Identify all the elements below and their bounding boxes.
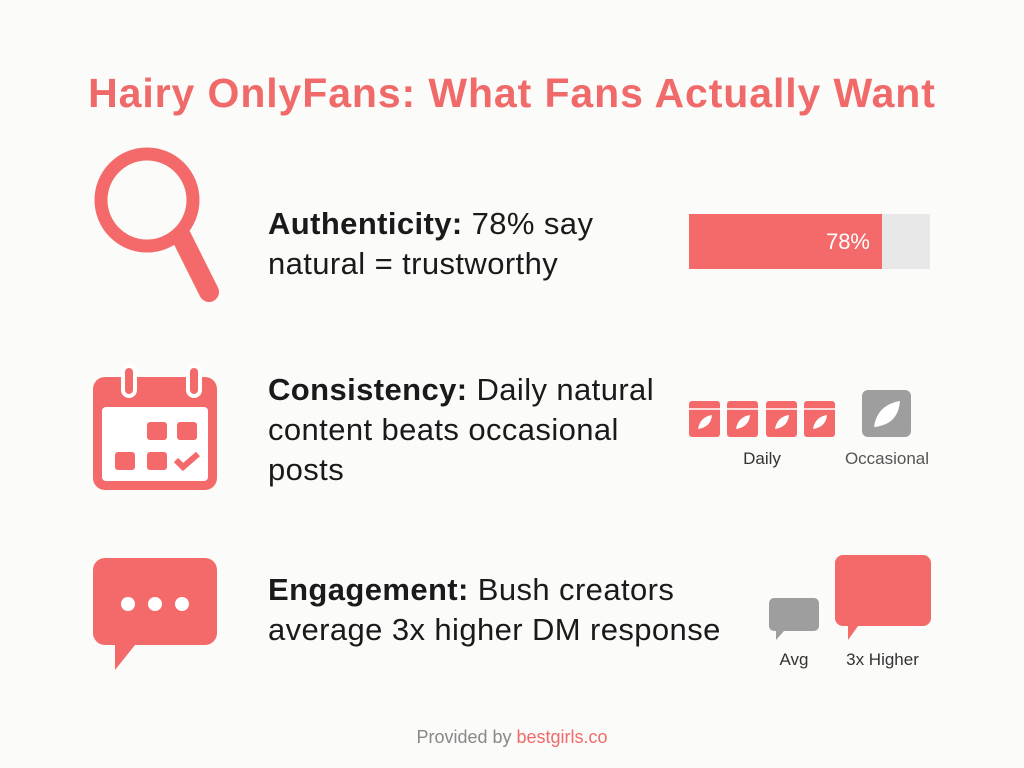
text: consistency	[268, 372, 654, 487]
text: engagement: Engagement: Bush creators	[268, 572, 674, 607]
text: authenticity: Authenticity: 78% say	[268, 206, 593, 241]
text: consistency: posts	[268, 452, 344, 487]
chart: DM response bubbles	[769, 555, 931, 640]
text: authenticity	[268, 206, 593, 281]
label: 3x higher: 3x Higher	[846, 650, 919, 669]
text: engagement: average 3x higher DM response	[268, 612, 721, 647]
label: daily: Daily	[743, 449, 781, 468]
title: Hairy OnlyFans: What Fans Actually Want	[88, 70, 936, 116]
text: consistency: content beats occasional	[268, 412, 619, 447]
bar chart: 78%: 78%	[826, 229, 870, 254]
text: engagement	[268, 572, 721, 647]
icon: magnifier	[94, 148, 219, 302]
icon: calendar	[93, 368, 217, 490]
text: consistency: Consistency: Daily natural	[268, 372, 654, 407]
icon: chat bubble	[93, 558, 217, 670]
label: avg: Avg	[780, 650, 808, 669]
label: occasional: Occasional	[845, 449, 929, 468]
chart: daily vs occasional	[689, 390, 911, 468]
text: authenticity: natural = trustworthy	[268, 246, 558, 281]
footer: Provided by bestgirls.co	[416, 727, 608, 747]
bar chart: 78%	[689, 214, 930, 269]
